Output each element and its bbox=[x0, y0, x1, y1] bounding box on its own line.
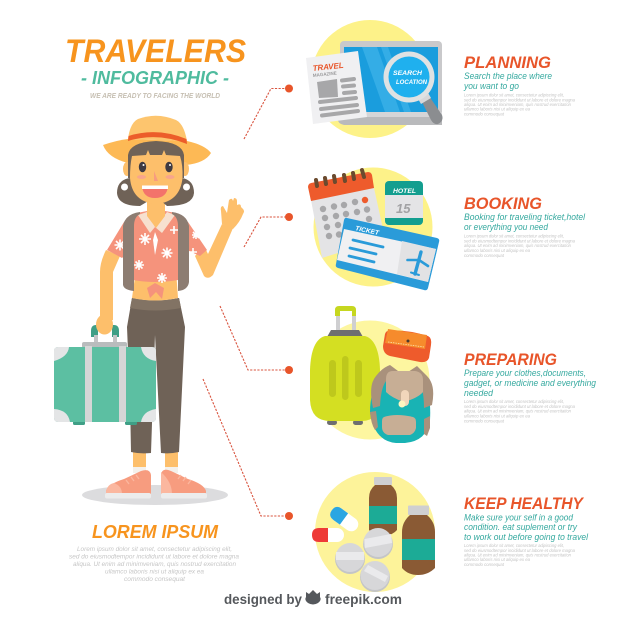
icon: rolling suitcase bbox=[310, 306, 380, 425]
icon: pills bbox=[335, 528, 393, 592]
icon: blue capsule bbox=[328, 505, 361, 534]
traveler figure bbox=[54, 116, 244, 505]
subtitle: infographic: - INFOGRAPHIC - bbox=[81, 68, 229, 88]
description: planning: Search the place where bbox=[464, 71, 552, 82]
description: planning bbox=[463, 71, 552, 92]
text block: lorem paragraph: Lorem ipsum dolor sit amet, consectetur adipiscing elit, bbox=[77, 546, 232, 553]
ears bbox=[123, 162, 189, 176]
connector: booking bbox=[244, 213, 293, 247]
body text: keep healthy: Lorem ipsum dolor sit amet, consectetur adipiscing elit, bbox=[464, 543, 564, 548]
backpack straps bbox=[123, 212, 189, 291]
cheeks bbox=[137, 175, 174, 179]
body text: booking: ullamco laboris nisi ut aliquip ex ea bbox=[464, 248, 530, 253]
text block: lorem paragraph: sed do eiusmodtempor incididunt ut labore et dolore magna bbox=[69, 554, 239, 560]
yellow circle bbox=[311, 20, 429, 138]
yellow circle bbox=[315, 472, 435, 592]
icon: hotel card: 15 bbox=[396, 201, 411, 216]
footer: freepik credit bbox=[224, 590, 402, 607]
description: preparing bbox=[464, 368, 597, 399]
body text: planning: commodo consequat bbox=[464, 112, 505, 116]
icon: airplane bbox=[408, 252, 428, 275]
footer: freepik credit: freepik.com bbox=[325, 591, 402, 607]
description: keep healthy: to work out before going to travel bbox=[464, 532, 589, 543]
panel: booking bbox=[308, 168, 586, 290]
text block: lorem paragraph bbox=[69, 546, 239, 583]
hair curls bbox=[117, 170, 194, 206]
body text: keep healthy: commodo consequat bbox=[464, 562, 505, 567]
yellow circle bbox=[314, 168, 432, 286]
tagline: WE ARE READY TO FACING THE WORLD bbox=[90, 91, 221, 100]
neck bbox=[147, 198, 165, 228]
icon: ticket: TICKET bbox=[355, 225, 381, 237]
body text: keep healthy: aliqua. Ut enim ad minimveniam, quis nostrud exercitation bbox=[464, 552, 571, 558]
body text: preparing: commodo consequat bbox=[464, 418, 505, 424]
connector: planning bbox=[244, 84, 293, 139]
icon: laptop bbox=[337, 41, 442, 125]
body text: planning: Lorem ipsum dolor sit amet, consectetur adipiscing elit, bbox=[464, 92, 564, 98]
suitcase bbox=[54, 325, 156, 425]
shoes bbox=[105, 470, 207, 498]
pants bbox=[127, 298, 185, 453]
midriff bbox=[132, 270, 178, 300]
hat crown bbox=[128, 116, 187, 141]
body text: preparing: Lorem ipsum dolor sit amet, consectetur adipiscing elit, bbox=[464, 399, 564, 404]
body text: keep healthy bbox=[464, 543, 575, 567]
description: planning: you want to go bbox=[463, 81, 519, 92]
legs bbox=[133, 450, 178, 473]
ground shadow bbox=[82, 485, 228, 505]
body text: booking: commodo consequat bbox=[464, 253, 505, 258]
connector: preparing bbox=[220, 306, 293, 374]
raised arm bbox=[195, 224, 233, 278]
icon: orange pouch bbox=[383, 329, 431, 362]
yellow circle bbox=[310, 320, 430, 440]
icon: calendar bbox=[308, 170, 385, 258]
icon: magnifier bbox=[384, 52, 442, 124]
body text: booking: sed do eiusmodtempor incididunt ut labore et dolore magna bbox=[464, 238, 575, 244]
panel: preparing bbox=[310, 306, 597, 443]
heading: lorem ipsum: LOREM IPSUM bbox=[92, 521, 219, 542]
icon: ticket bbox=[336, 218, 439, 290]
heading: booking: BOOKING bbox=[464, 195, 542, 213]
icon: backpack bbox=[370, 365, 433, 443]
icon: hotel card: HOTEL bbox=[393, 188, 416, 195]
body text: preparing: sed do eiusmodtempor incididunt ut labore et dolore magna bbox=[464, 404, 575, 409]
body text: planning: ullamco laboris nisi ut aliquip ex ea bbox=[464, 106, 530, 112]
body text: booking bbox=[464, 234, 575, 258]
description: booking: Booking for traveling ticket,hotel bbox=[464, 212, 586, 223]
body text: booking: Lorem ipsum dolor sit amet, consectetur adipiscing elit, bbox=[464, 234, 564, 238]
icon: magnifier: LOCATION bbox=[396, 79, 428, 86]
body text: planning: aliqua. Ut enim ad minimveniam, quis nostrud exercitation bbox=[464, 102, 571, 107]
text block: lorem paragraph: commodo consequat bbox=[124, 576, 185, 583]
body text: booking: aliqua. Ut enim ad minimveniam, quis nostrud exercitation bbox=[464, 243, 571, 248]
icon: small bottle bbox=[369, 477, 397, 535]
icon: large bottle bbox=[402, 506, 435, 575]
icon: hotel card bbox=[385, 181, 423, 225]
icon: freepik logo bbox=[305, 590, 321, 604]
icon: red capsule bbox=[312, 528, 344, 542]
icon: magazine: TRAVEL bbox=[312, 61, 344, 73]
panel: planning bbox=[306, 20, 575, 138]
description: preparing: needed bbox=[464, 388, 494, 399]
eyes bbox=[139, 162, 173, 172]
hat brim bbox=[103, 139, 211, 165]
text block: lorem paragraph: ullamco laboris nisi ut aliquip ex ea bbox=[105, 568, 204, 576]
hair cap bbox=[128, 141, 184, 178]
icon: magazine bbox=[306, 51, 367, 124]
text block: lorem paragraph: aliqua. Ut enim ad minimveniam, quis nostrud exercitation bbox=[73, 561, 236, 568]
description: keep healthy bbox=[464, 512, 589, 543]
body text: planning bbox=[464, 92, 575, 116]
panel: keep healthy bbox=[312, 472, 589, 592]
description: booking: or everything you need bbox=[464, 222, 549, 233]
connector: keep healthy bbox=[203, 379, 293, 520]
heading: planning: PLANNING bbox=[464, 54, 551, 72]
hat band bbox=[128, 132, 187, 144]
body text: preparing bbox=[464, 399, 575, 424]
title: travelers: TRAVELERS bbox=[65, 33, 247, 69]
body text: preparing: aliqua. Ut enim ad minimveniam, quis nostrud exercitation bbox=[464, 408, 571, 414]
footer: freepik credit: designed by bbox=[224, 591, 302, 607]
body text: keep healthy: sed do eiusmodtempor incididunt ut labore et dolore magna bbox=[464, 548, 575, 553]
body text: keep healthy: ullamco laboris nisi ut aliquip ex ea bbox=[464, 557, 530, 562]
waving hand bbox=[221, 198, 244, 229]
description: booking bbox=[464, 212, 586, 233]
heading: preparing: PREPARING bbox=[464, 351, 557, 369]
description: keep healthy: condition. eat suplement or try bbox=[464, 522, 578, 533]
icon: magazine: MAGAZINE bbox=[313, 71, 337, 78]
body text: preparing: ullamco laboris nisi ut aliquip ex ea bbox=[464, 414, 530, 418]
shirt bbox=[107, 211, 207, 299]
title block bbox=[65, 33, 247, 100]
nose bbox=[154, 171, 158, 181]
description: keep healthy: Make sure your self in a good bbox=[464, 512, 574, 524]
hand on handle bbox=[96, 314, 113, 334]
left arm bbox=[100, 250, 120, 320]
description: preparing: gadget, or medicine and everything bbox=[464, 378, 597, 389]
description: preparing: Prepare your clothes,documents, bbox=[464, 368, 586, 379]
icon: magnifier: SEARCH bbox=[393, 70, 423, 77]
mouth bbox=[142, 186, 168, 198]
face bbox=[130, 150, 183, 204]
body text: planning: sed do eiusmodtempor incididunt ut labore et dolore magna bbox=[464, 98, 575, 102]
heading: keep healthy: KEEP HEALTHY bbox=[464, 495, 585, 513]
